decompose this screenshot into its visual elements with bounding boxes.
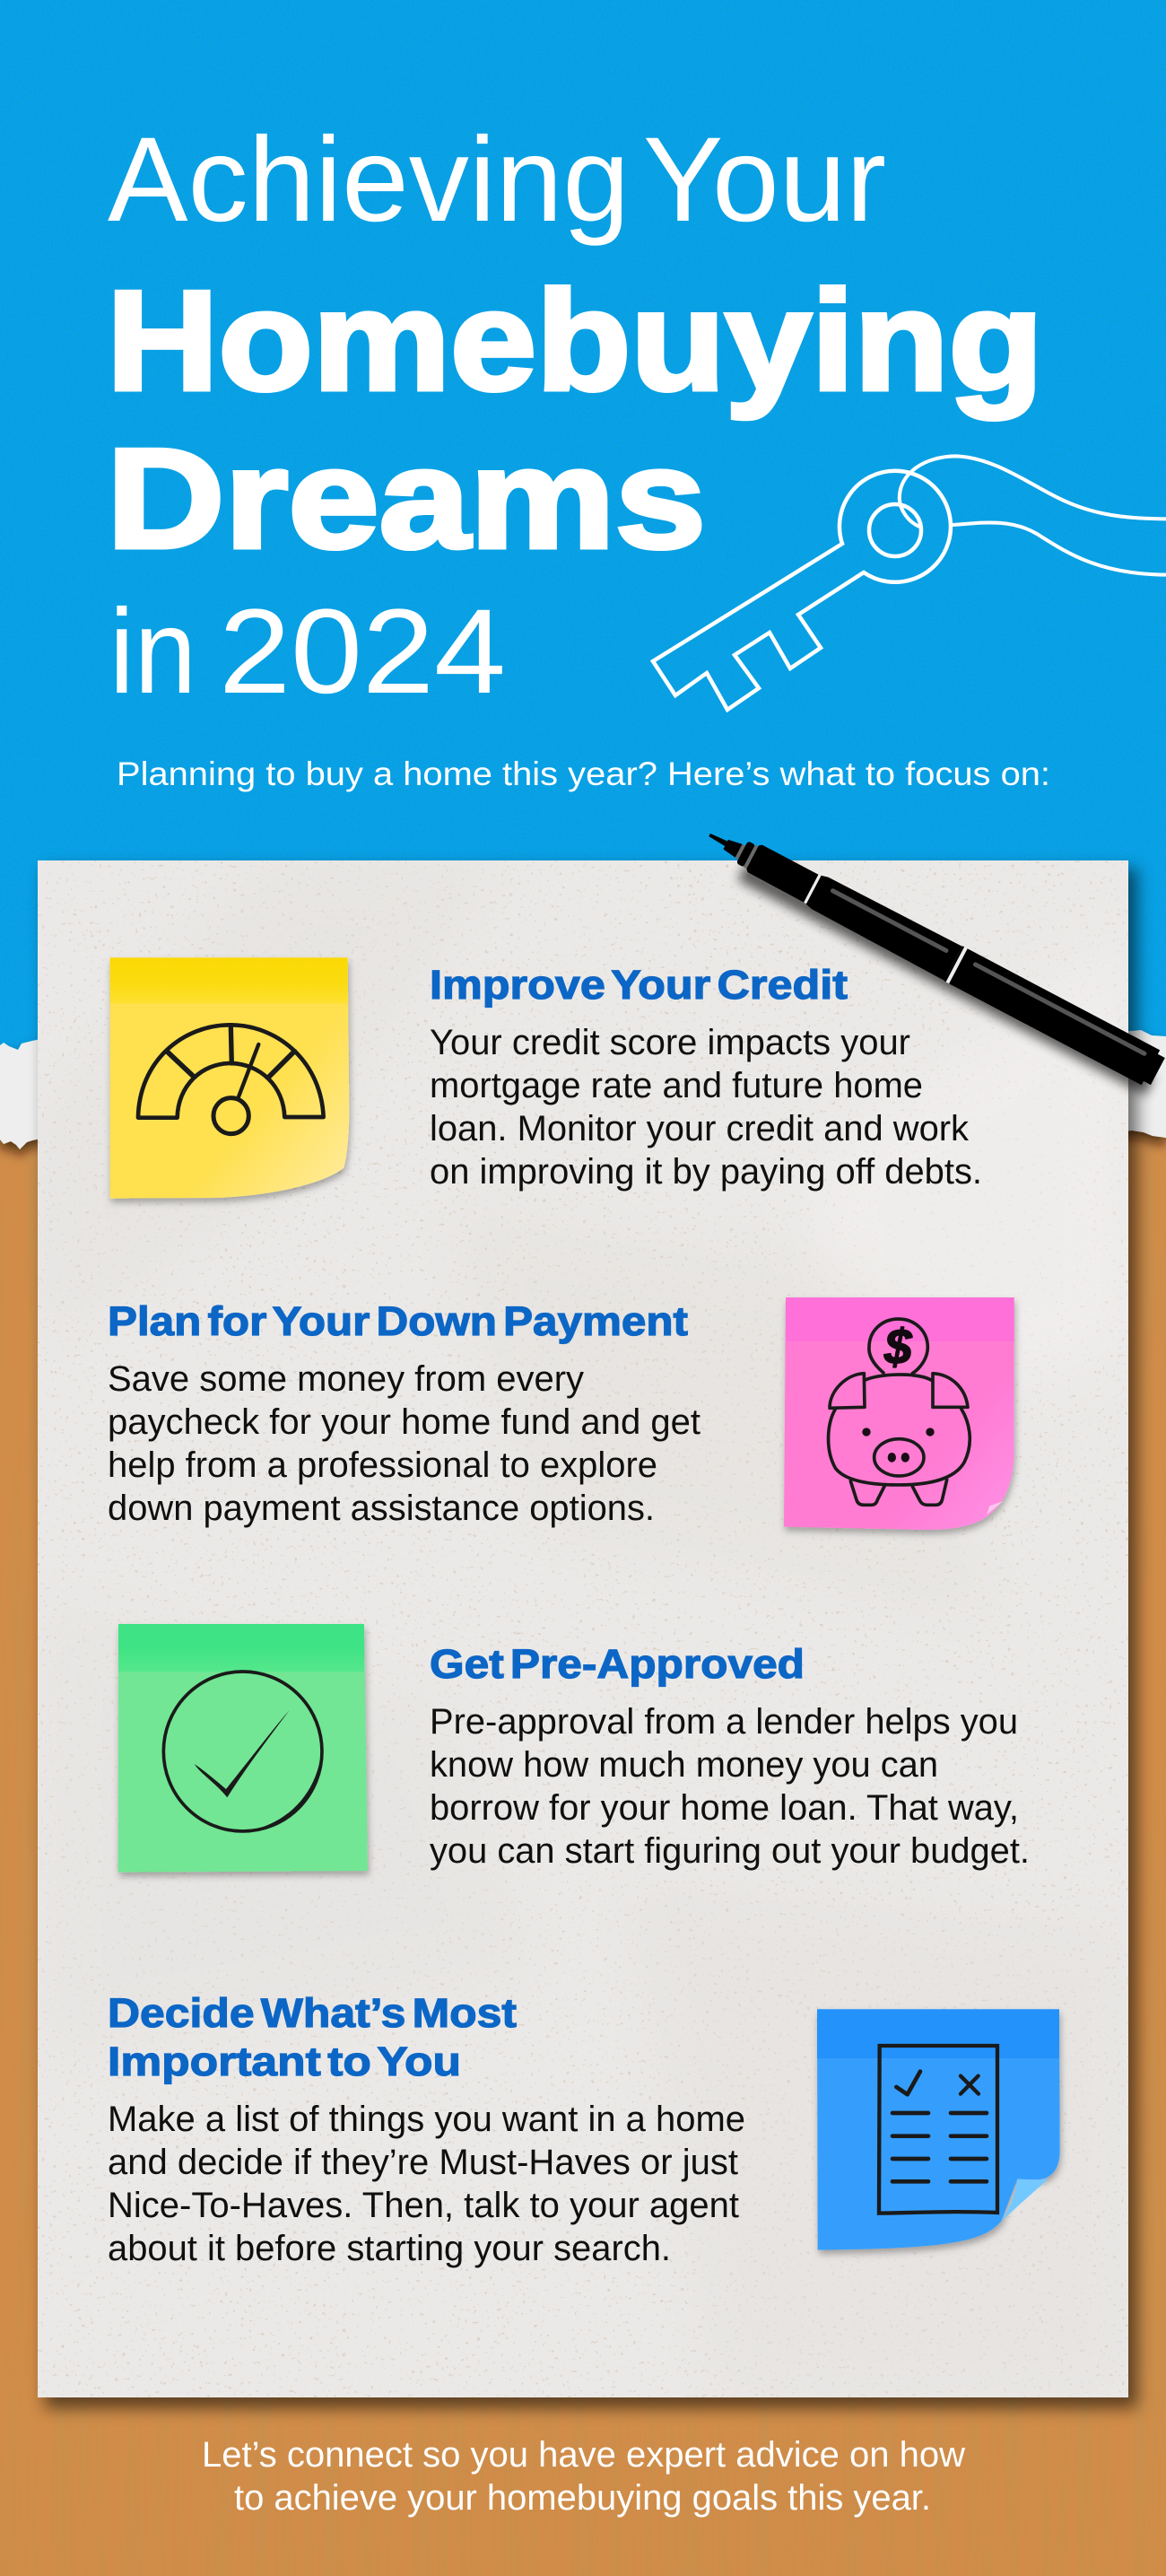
text: improve your credit: mortgage rate and future home (430, 1066, 923, 1105)
heading: plan for your down payment: Plan for Your Down Payment (108, 1298, 688, 1344)
panel: decide what's most important (108, 1990, 1060, 2268)
text: decide what's most important: and decide if they’re Must-Haves or just (108, 2143, 738, 2182)
paper shadow (45, 869, 1137, 2408)
text: improve your credit: Your credit score impacts your (430, 1023, 910, 1062)
text: decide what's most important: about it before starting your search. (108, 2229, 671, 2268)
title: 2024 (219, 585, 506, 719)
text: get pre-approved: you can start figuring out your budget. (430, 1831, 1030, 1871)
call to action: to achieve your homebuying goals this year. (234, 2478, 931, 2518)
title: Homebuying (107, 262, 1043, 420)
icon: key on ribbon (653, 456, 1166, 710)
icon: check mark in circle (163, 1672, 322, 1832)
text: plan for your down payment: down payment assistance options. (108, 1489, 655, 1528)
title: Achieving Your (108, 113, 886, 247)
heading: decide what's most important to you: Important to You (108, 2039, 461, 2084)
panel: get pre-approved (118, 1624, 1030, 1873)
text: get pre-approved (430, 1702, 1030, 1871)
sticky note: blue with checklist icon (817, 2009, 1060, 2250)
icon: piggy bank (829, 1318, 970, 1505)
call to action: Let’s connect so you have expert advice on how (202, 2435, 965, 2475)
panel: improve your credit (110, 957, 982, 1199)
heading: get pre-approved: Get Pre-Approved (430, 1641, 805, 1687)
heading: decide what's most important to you (108, 1990, 517, 2084)
sticky note: pink with piggy bank icon (784, 1297, 1014, 1530)
torn paper strip: left (0, 1038, 45, 1149)
sticky note: green with check mark icon (118, 1624, 368, 1873)
heading: improve your credit: Improve Your Credit (430, 962, 848, 1008)
text: decide what's most important (108, 2100, 745, 2268)
panel: crumpled paper sheet (38, 860, 1128, 2397)
text: plan for your down payment: Save some money from every (108, 1359, 584, 1399)
text: get pre-approved: Pre-approval from a lender helps you (430, 1702, 1018, 1742)
text: plan for your down payment: paycheck for your home fund and get (108, 1402, 700, 1442)
icon: credit score gauge (138, 1025, 324, 1134)
title: Dreams (107, 420, 706, 578)
text: decide what's most important: Nice-To-Haves. Then, talk to your agent (108, 2186, 739, 2225)
text: get pre-approved: borrow for your home loan. That way, (430, 1788, 1019, 1828)
text: improve your credit: loan. Monitor your credit and work (430, 1109, 970, 1148)
icon: checklist (879, 2046, 997, 2214)
title: in (109, 585, 196, 719)
text: decide what's most important: Make a list of things you want in a home (108, 2100, 745, 2139)
text: plan for your down payment: help from a professional to explore (108, 1445, 657, 1485)
text: plan for your down payment (108, 1359, 700, 1528)
heading: decide what's most important to you: Decide What’s Most (108, 1990, 517, 2036)
icon: piggy bank: $ (883, 1318, 913, 1374)
text: get pre-approved: know how much money you can (430, 1745, 938, 1785)
subtitle: Planning to buy a home this year? Here’s what to focus on: (117, 755, 1050, 792)
panel: plan for your down payment (108, 1297, 1014, 1530)
call to action (202, 2435, 965, 2518)
torn paper strip: right (1112, 1030, 1166, 1138)
pen shadow (737, 862, 1154, 1096)
title (107, 113, 1043, 719)
icon: black marker pen (700, 817, 1166, 1089)
background: blue paper (0, 0, 1166, 1104)
text: improve your credit (430, 1023, 982, 1192)
text: improve your credit: on improving it by paying off debts. (430, 1152, 982, 1192)
background: wood (0, 1090, 1166, 2576)
sticky note: yellow with gauge icon (110, 957, 349, 1199)
